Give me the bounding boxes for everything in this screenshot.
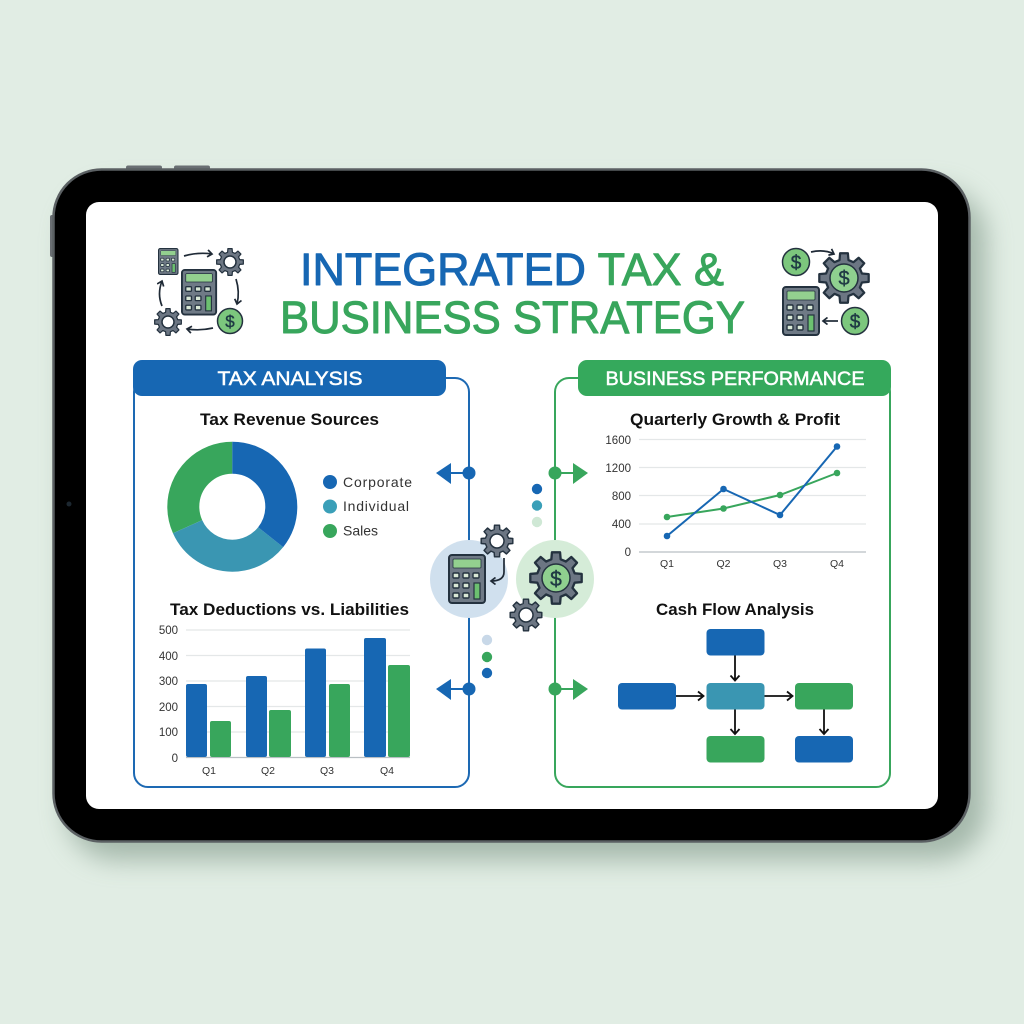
bar chart: [159, 625, 410, 777]
central hub icon: [430, 525, 594, 631]
panel header: BUSINESS PERFORMANCE: [606, 369, 864, 390]
panel header: TAX ANALYSIS: [218, 369, 362, 390]
tablet screen: [86, 202, 938, 809]
line chart: 1200: [605, 463, 631, 475]
line chart: 800: [612, 491, 631, 503]
icon: left calculator cycle: [155, 249, 243, 335]
line chart: Q2: [716, 558, 731, 570]
panel header: [133, 360, 446, 396]
donut legend: [323, 474, 412, 538]
line chart: Q1: [660, 558, 674, 570]
bar chart: 200: [159, 702, 178, 714]
bar chart: Q4: [380, 765, 394, 777]
line chart: Q4: [830, 558, 844, 570]
bar chart: 100: [159, 727, 178, 739]
line chart: 1600: [605, 435, 631, 447]
panel: business performance: [555, 360, 891, 787]
line chart: Q3: [773, 558, 787, 570]
connector arrows: business side: [548, 463, 588, 700]
status dots: lower: [482, 635, 492, 678]
title: BUSINESS STRATEGY: [280, 292, 745, 343]
heading: cash flow analysis: Cash Flow Analysis: [656, 600, 814, 619]
connector arrows: tax side: [436, 463, 476, 700]
tablet bezel: [54, 170, 970, 842]
icon: dollar gear: $: [550, 568, 562, 591]
bar chart: Q3: [320, 765, 334, 777]
flow diagram: [618, 629, 853, 762]
icon: right calculator and dollar gear: $: [850, 312, 861, 333]
heading: quarterly growth and profit: Quarterly Growth & Profit: [630, 410, 840, 429]
panel border: [555, 378, 890, 787]
panel: tax analysis: [133, 360, 469, 787]
hub circle: tax: [430, 540, 508, 618]
icon: left calculator cycle: $: [225, 312, 235, 331]
icon: lower gear: [510, 599, 542, 631]
donut chart: [183, 458, 281, 556]
hub circle: business: [516, 540, 594, 618]
panel header: [578, 360, 891, 396]
icon: right calculator and dollar gear: $: [838, 268, 850, 290]
donut legend: Sales: [343, 522, 378, 538]
icon: dollar gear: [530, 552, 582, 604]
line chart: 400: [612, 519, 631, 531]
bar chart: Q2: [261, 765, 275, 777]
bar chart: 500: [159, 625, 178, 637]
icon: right calculator and dollar gear: $: [791, 253, 802, 274]
panel border: [134, 378, 469, 787]
bar chart: 0: [172, 753, 178, 765]
icon: right calculator and dollar gear: [782, 248, 869, 335]
heading: tax deductions vs liabilities: Tax Deductions vs. Liabilities: [170, 600, 409, 619]
donut legend: Individual: [343, 498, 409, 514]
title: [280, 244, 745, 343]
status dots: upper: [532, 484, 542, 527]
tablet device: [50, 166, 986, 860]
tablet shadow: [66, 188, 986, 860]
icon: hub calculator: [449, 555, 485, 603]
line chart: 0: [625, 547, 631, 559]
icon: top gear: [481, 525, 513, 557]
icon: hub curved arrow: [491, 558, 504, 581]
bar chart: 400: [159, 651, 178, 663]
donut legend: Corporate: [343, 474, 412, 490]
tablet camera: [66, 502, 72, 506]
bar chart: Q1: [202, 765, 216, 777]
line chart: [605, 435, 866, 570]
bar chart: 300: [159, 676, 178, 688]
tablet side buttons: [50, 166, 210, 257]
title: INTEGRATED TAX &: [300, 244, 724, 295]
heading: tax revenue sources: Tax Revenue Sources: [200, 410, 379, 429]
